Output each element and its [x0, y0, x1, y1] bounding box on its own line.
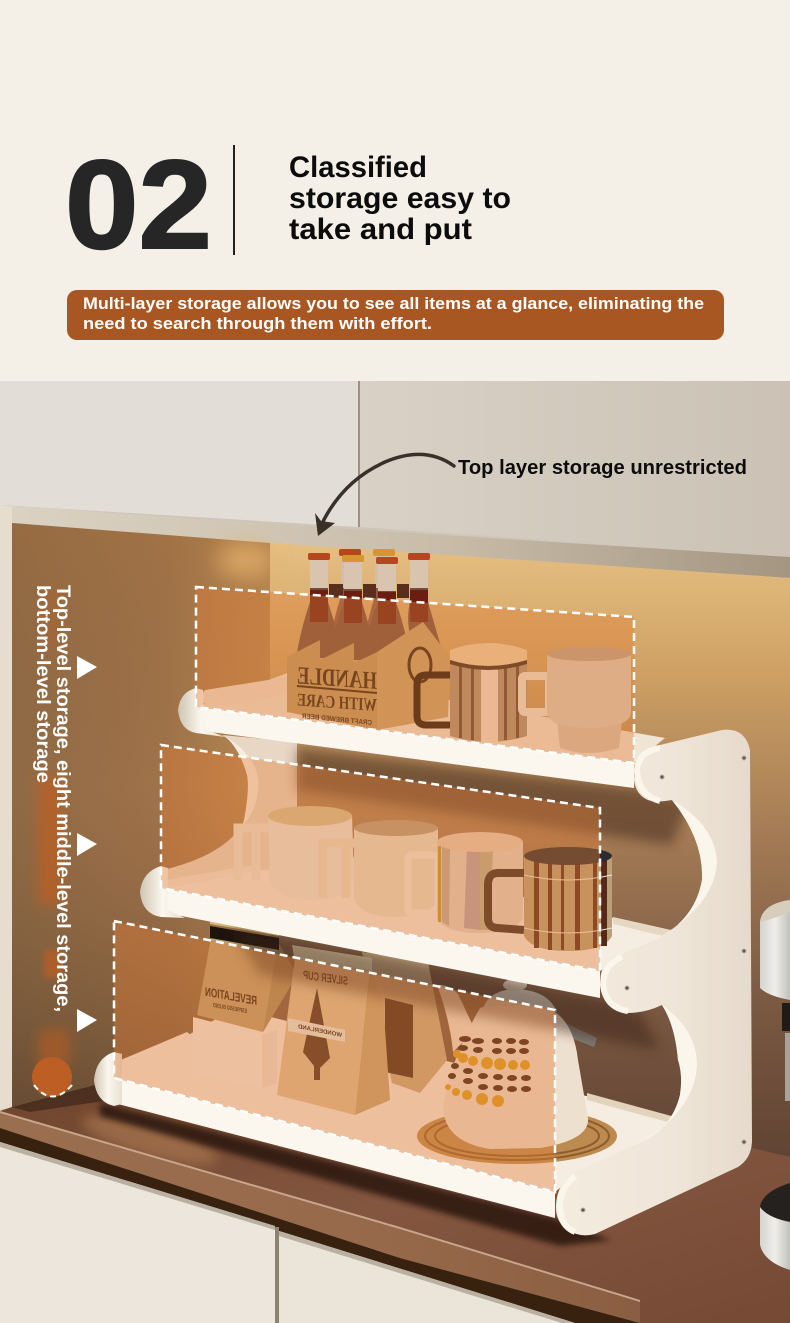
kettle	[437, 979, 597, 1149]
beer carrier: CRAFT BREWED BEER	[302, 713, 372, 727]
beer carrier: WITH CARE	[297, 689, 377, 715]
bottles	[296, 549, 443, 660]
bag: Revelation box and pouch: REVELATION	[205, 985, 257, 1008]
mug A	[238, 806, 354, 900]
highlighted zone: top layer	[196, 587, 634, 763]
middle shelf surface	[161, 835, 695, 971]
description banner: Multi-layer storage allows you to see all items at a glance, eliminating the	[83, 294, 704, 313]
bag: Revelation box and pouch: ESPRESSO BLEND	[213, 1003, 247, 1015]
bag: Revelation box and pouch	[193, 920, 297, 1088]
middle shelf tier	[140, 735, 695, 1050]
upper arc rim	[655, 800, 717, 940]
top shelf left cap	[178, 688, 225, 737]
middle shelf back rail	[613, 917, 680, 940]
bottom shelf tier	[94, 920, 690, 1218]
curved arrow	[315, 454, 454, 536]
title: Classified	[289, 151, 427, 184]
vertical caption: bottom-level storage	[32, 585, 54, 783]
vertical caption: Top-level storage, eight middle-level storage,	[52, 585, 74, 1012]
title: storage easy to	[289, 182, 511, 215]
front bottles	[296, 553, 443, 660]
highlighted zone: bottom layer	[114, 921, 555, 1192]
header background	[0, 0, 790, 381]
right side frame	[556, 730, 752, 1235]
bag: back pouch with panel	[362, 952, 447, 1093]
highlighted zone: middle layer	[161, 745, 600, 971]
mug C	[408, 832, 523, 933]
middle shelf left cap	[140, 866, 185, 918]
kettle leaf and dot pattern	[445, 1036, 531, 1107]
top shelf tier	[178, 549, 690, 845]
photo scene: kitchen cabinet	[0, 381, 790, 1323]
cap highlights	[560, 748, 660, 1232]
bottom shelf front bar	[114, 1078, 555, 1218]
back bottles	[329, 549, 405, 646]
cream mug	[522, 647, 631, 753]
title: take and put	[289, 213, 472, 246]
dashed arc at smudge base	[34, 1085, 72, 1096]
middle shelf shadow on wall	[230, 925, 660, 1050]
carrier dividers	[329, 584, 409, 598]
beer carrier: HANDLE	[297, 662, 377, 695]
trivet	[417, 1108, 617, 1164]
top shelf front bar	[196, 707, 634, 788]
bag: Silver Cup pouch	[277, 945, 390, 1115]
description banner: need to search through them with effort.	[83, 314, 432, 333]
arrow caption: Top layer storage unrestricted	[458, 457, 747, 479]
mug B	[323, 820, 438, 917]
beer carrier	[287, 622, 450, 730]
lower arc rim	[640, 1005, 697, 1143]
bottom shelf surface	[114, 1008, 690, 1192]
rivets	[581, 756, 746, 1212]
bag: Silver Cup pouch: WONDERLAND	[297, 1024, 342, 1039]
orange smudges on left wall	[32, 590, 72, 1097]
bottom shelf back rail	[587, 1093, 675, 1124]
vertical caption	[32, 585, 74, 1012]
coffee machine at right edge	[760, 900, 790, 1270]
middle shelf front bar	[161, 888, 600, 998]
bottom shelf left cap	[94, 1052, 122, 1106]
section number 02: 02	[65, 134, 212, 275]
title	[289, 151, 511, 246]
description banner	[67, 290, 724, 340]
lidded striped mug	[417, 643, 527, 742]
left rear bracket	[163, 735, 297, 888]
vertical divider	[233, 145, 235, 255]
top shelf shadow on wall	[297, 748, 690, 845]
top shelf left lip	[197, 677, 287, 708]
bag: Silver Cup pouch: SILVER CUP	[303, 968, 348, 988]
bottom shelf left lip	[114, 1032, 200, 1078]
mug D	[488, 847, 612, 951]
white triangle markers	[77, 656, 97, 1032]
top shelf surface	[196, 672, 665, 763]
